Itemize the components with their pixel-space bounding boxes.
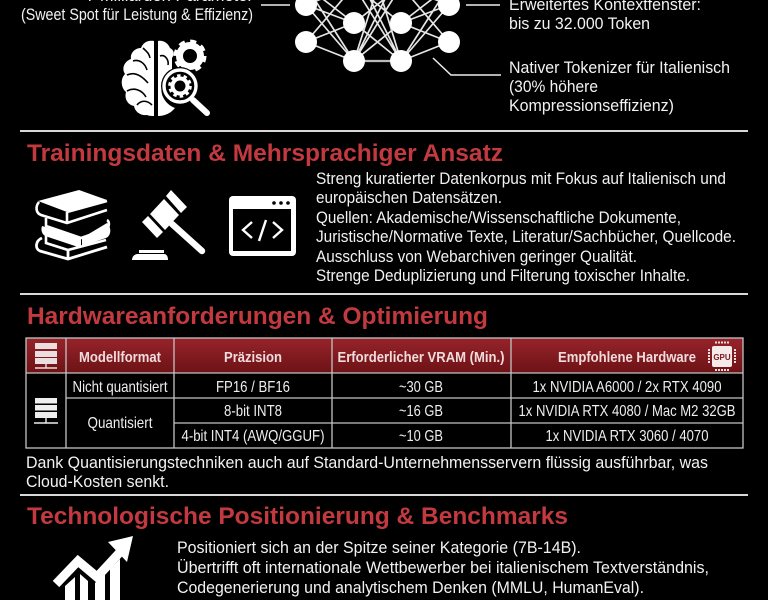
text: quantization note: Dank Quantisierungstechniken auch auf Standard-Unternehmensservern flüssig ausführbar, was xyxy=(26,453,708,472)
table row: not quantized: ~30 GB xyxy=(399,379,443,396)
table grid xyxy=(26,338,743,448)
table row: 8-bit: ~16 GB xyxy=(399,403,443,420)
icon: gavel xyxy=(132,190,202,260)
table row: 4-bit: ~10 GB xyxy=(399,428,443,445)
table header labels: Modellformat xyxy=(79,349,161,366)
icon: growth chart xyxy=(56,536,133,600)
text: training data description xyxy=(316,169,736,285)
table header background xyxy=(26,338,743,373)
heading: positioning: Technologische Positionierung & Benchmarks xyxy=(27,503,568,530)
icon: books xyxy=(36,190,110,259)
table row: not quantized: FP16 / BF16 xyxy=(216,379,290,396)
connector: parameters xyxy=(261,4,290,6)
text: training data description: Streng kuratierter Datenkorpus mit Fokus auf Italienisch und xyxy=(316,169,726,188)
text: positioning description: Codegenerierung und analytischem Denken (MMLU, HumanEval). xyxy=(177,578,644,597)
text: native tokenizer: (30% höhere xyxy=(509,77,598,96)
icon: brain with gears and magnifier xyxy=(122,41,207,116)
text: training data description: Juristische/Normative Texte, Literatur/Sachbücher, Quellcode. xyxy=(316,227,736,246)
text: training data description: Quellen: Akademische/Wissenschaftliche Dokumente, xyxy=(316,208,681,227)
table row: 4-bit xyxy=(182,428,709,445)
table header labels: Empfohlene Hardware xyxy=(558,349,696,366)
table row: 8-bit: 8-bit INT8 xyxy=(224,403,282,420)
icon: server in body xyxy=(34,398,58,423)
connector: tokenizer xyxy=(433,58,501,75)
text: native tokenizer xyxy=(509,58,730,115)
text: training data description: Strenge Deduplizierung und Filterung toxischer Inhalte. xyxy=(316,266,690,285)
table: hardware requirements xyxy=(26,338,743,448)
text: model parameters xyxy=(21,0,253,24)
heading: training data: Trainingsdaten & Mehrsprachiger Ansatz xyxy=(27,140,503,167)
text: model parameters: (Sweet Spot für Leistung & Effizienz) xyxy=(21,5,253,24)
table row: 4-bit: 1x NVIDIA RTX 3060 / 4070 xyxy=(546,428,709,445)
table row: 8-bit xyxy=(224,403,736,420)
table row: 4-bit: 4-bit INT4 (AWQ/GGUF) xyxy=(182,428,324,445)
text: native tokenizer: Kompressionseffizienz) xyxy=(509,96,674,115)
heading: hardware: Hardwareanforderungen & Optimierung xyxy=(27,303,488,330)
connector: context window xyxy=(466,4,500,6)
table header labels: Präzision xyxy=(224,349,282,366)
text: context window: bis zu 32.000 Token xyxy=(509,14,650,33)
table row: quantized label: Quantisiert xyxy=(88,415,153,432)
icon: GPU chip: GPU xyxy=(713,353,731,362)
table header labels: Erforderlicher VRAM (Min.) xyxy=(338,349,504,366)
table row: not quantized xyxy=(72,379,722,396)
text: positioning description: Positioniert sich an der Spitze seiner Kategorie (7B-14B). xyxy=(177,538,581,557)
table header labels xyxy=(79,349,696,366)
icon: code window xyxy=(229,196,296,256)
diagram: neural network xyxy=(295,0,460,72)
text: native tokenizer: Nativer Tokenizer für Italienisch xyxy=(509,58,730,77)
icon: server in header xyxy=(35,343,57,368)
table row: not quantized: Nicht quantisiert xyxy=(72,379,168,396)
text: positioning description: Übertrifft oft internationale Wettbewerber bei italienischem Textverständnis, xyxy=(177,558,709,577)
text: quantization note: Cloud-Kosten senkt. xyxy=(26,472,169,491)
text: training data description: europäischen Datensätzen. xyxy=(316,188,502,207)
icon: GPU chip xyxy=(709,342,735,370)
text: training data description: Ausschluss von Webarchiven geringer Qualität. xyxy=(316,247,637,266)
table row: not quantized: 1x NVIDIA A6000 / 2x RTX 4090 xyxy=(532,379,722,396)
text: quantization note xyxy=(26,453,708,491)
text: positioning description xyxy=(177,538,709,597)
text: context window xyxy=(509,0,701,33)
